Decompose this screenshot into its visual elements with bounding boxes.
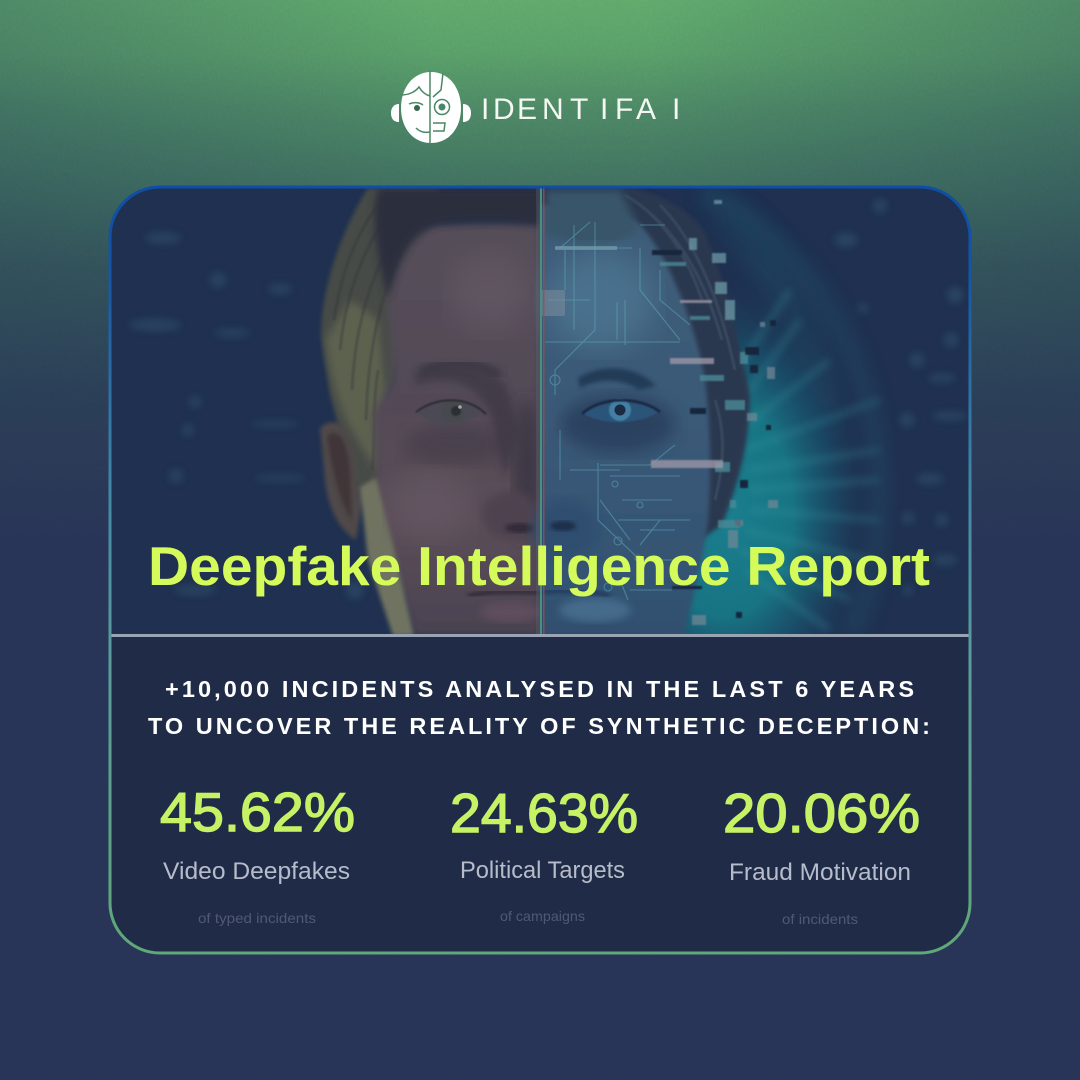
stat: fraud motivation: of incidents xyxy=(782,911,858,927)
divider xyxy=(110,634,970,637)
hero image: half human half AI face xyxy=(112,188,968,634)
intro text xyxy=(148,676,930,739)
stat: fraud motivation xyxy=(723,782,920,927)
blurred particles right xyxy=(834,199,968,595)
woman half xyxy=(533,186,778,636)
man: dark top hair xyxy=(375,188,541,300)
stat: video deepfakes: Video Deepfakes xyxy=(163,858,350,885)
stat: political targets: 24.63% xyxy=(450,782,638,844)
man: shading xyxy=(412,428,496,462)
wordmark: IDENTIFAI xyxy=(481,93,680,126)
icon: half human half robot head xyxy=(391,71,471,144)
teal glow and rays xyxy=(682,188,886,634)
man: jaw highlight xyxy=(360,478,414,636)
man: lit side hair xyxy=(321,188,440,505)
man: mouth xyxy=(468,592,541,596)
man: eye xyxy=(420,408,480,421)
intro text: TO UNCOVER THE REALITY OF SYNTHETIC DECEPTION: xyxy=(148,713,930,739)
stat: political targets: of campaigns xyxy=(500,908,585,924)
stat: video deepfakes xyxy=(160,781,355,926)
man: ear xyxy=(320,422,362,540)
woman: circuit lines xyxy=(545,222,690,600)
title: Deepfake Intelligence Report xyxy=(148,535,930,597)
woman: eye xyxy=(584,402,658,422)
stat: political targets: Political Targets xyxy=(460,857,625,884)
woman: top hair xyxy=(541,186,750,540)
woman: face xyxy=(541,205,710,636)
stat: fraud motivation: 20.06% xyxy=(723,782,920,844)
man half xyxy=(320,188,541,636)
stat: video deepfakes: 45.62% xyxy=(160,781,355,843)
stat: political targets xyxy=(450,782,638,924)
logo: IdentifAI xyxy=(391,71,680,144)
man: face xyxy=(363,222,541,636)
stat: video deepfakes: of typed incidents xyxy=(198,910,316,926)
intro text: +10,000 INCIDENTS ANALYSED IN THE LAST 6 YEARS xyxy=(165,676,914,702)
stat: fraud motivation: Fraud Motivation xyxy=(729,859,911,886)
panel: report card xyxy=(109,186,971,953)
card border xyxy=(110,187,970,953)
centre seam: green and red glitch lines xyxy=(536,186,544,636)
icon: blurred data particles left xyxy=(129,232,364,599)
woman: glitch blocks xyxy=(651,200,778,625)
